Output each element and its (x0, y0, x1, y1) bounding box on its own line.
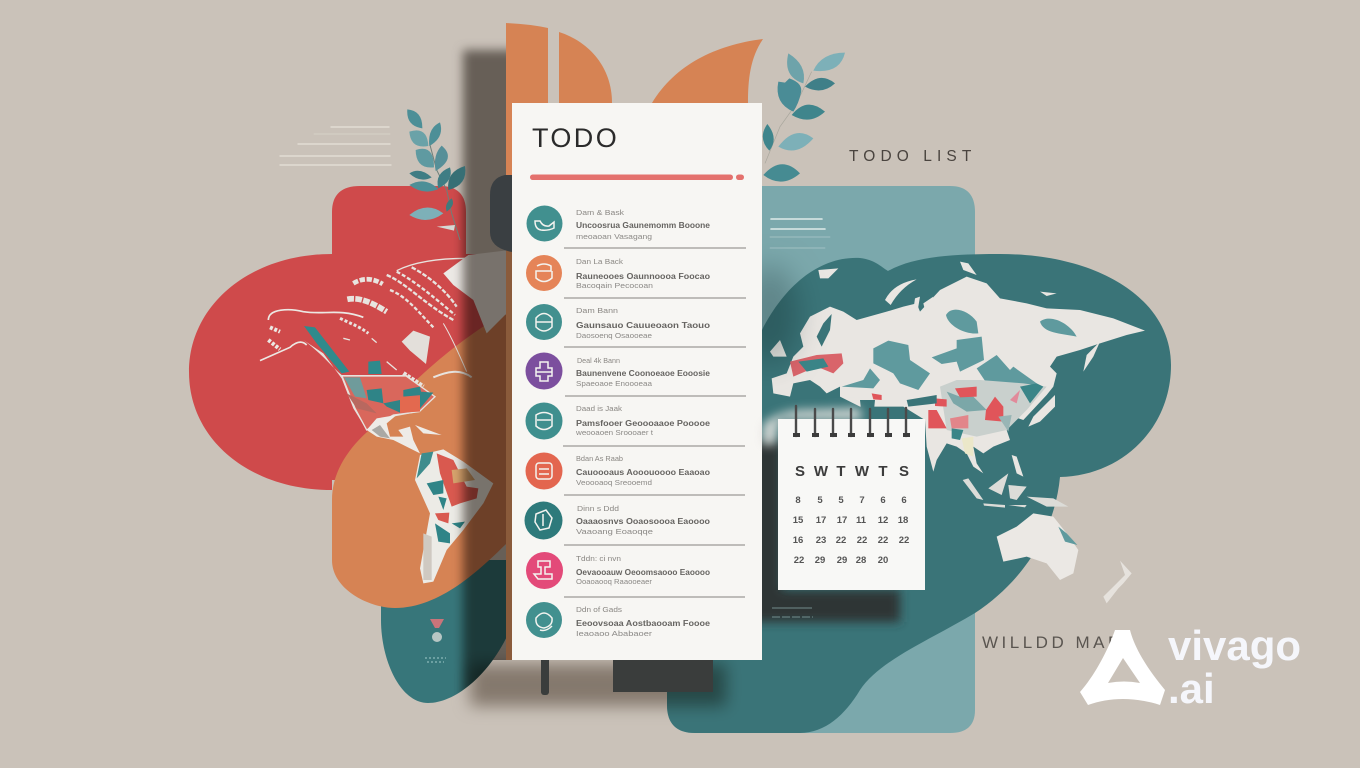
todo item 5: Daad is Jaak (576, 404, 622, 413)
todo item 8: Ooaoaooq Raaooeaer (576, 577, 653, 586)
todo item 2: Rauneooes Oaunnoooa Foocao (576, 272, 710, 281)
dark pin below panel (541, 655, 549, 695)
Baltic sea (817, 314, 832, 347)
calendar dates: 22 (899, 535, 909, 546)
Pacific coast teal strips (304, 326, 382, 374)
todo item 3: Dam Bann (576, 306, 618, 315)
calendar dates: 15 (793, 515, 804, 526)
Indonesia (963, 473, 1068, 508)
todo item 4: Spaeoaoe Enoooeaa (576, 379, 653, 388)
calendar dates: 22 (794, 555, 804, 566)
panel shadow: bottom (470, 664, 726, 706)
calendar weekday header: W (855, 463, 870, 480)
United States states (342, 376, 435, 430)
todo item 7: Dinn s Ddd (577, 504, 619, 513)
world map: Americas (260, 250, 510, 583)
calendar dates: 22 (878, 535, 888, 546)
dark tab behind panel (490, 175, 512, 252)
Europe color details (790, 353, 843, 377)
calendar dates: 22 (836, 535, 846, 546)
calendar dates: 7 (859, 495, 865, 506)
todo item 7: Vaaoang Eoaoqqe (576, 527, 653, 536)
Australia (997, 513, 1078, 580)
panel: dark teal blob (667, 254, 1171, 733)
Arctic and coastal islands (770, 262, 1100, 372)
calendar rings (796, 406, 906, 436)
calendar dates: 5 (838, 495, 844, 506)
calendar dates: 11 (856, 515, 867, 526)
calendar dates: 17 (837, 515, 847, 526)
South America (415, 449, 493, 583)
todo item 5: weooaoen Sroooaer t (575, 428, 654, 437)
todo item 1: meoaoan Vasagang (576, 232, 652, 241)
Middle East details (860, 395, 937, 417)
progress bar (530, 174, 744, 180)
calendar (778, 406, 925, 590)
decorative caption lines left (280, 127, 391, 165)
Greenland (443, 250, 510, 333)
Arctic islands (340, 258, 472, 387)
todo item 5 (526, 402, 711, 440)
calendar dates: 23 (816, 535, 826, 546)
todo item 1 (526, 206, 711, 242)
todo item 7: Oaaaosnvs Ooaosoooa Eaoooo (576, 517, 710, 526)
New Zealand (1103, 561, 1132, 603)
calendar dates: 29 (837, 555, 847, 566)
calendar weekday header: W (814, 463, 829, 480)
dark rectangle below panel (613, 655, 713, 692)
todo item 9: Ieaoaoo Ababaoer (576, 629, 653, 638)
todo item 9: Ddn of Gads (576, 605, 622, 614)
dividers (563, 248, 746, 597)
logo: vivago.ai (1080, 622, 1301, 712)
calendar dates: 29 (815, 555, 825, 566)
calendar ring holes (793, 433, 910, 437)
todo item 6 (526, 452, 710, 490)
todo item 2: Bacoqain Pecocoan (576, 281, 653, 290)
Alaska islands (268, 327, 280, 349)
heading: world map: WILLDD MAP (982, 633, 1123, 652)
todo item 4: Deal 4k Bann (577, 356, 620, 365)
infographic canvas (188, 23, 1300, 733)
panel shadow: left side (456, 43, 506, 693)
todo item 1: Dam & Bask (576, 208, 624, 217)
calendar weekday header: T (836, 463, 846, 480)
panel: orange blob (332, 310, 510, 608)
orange shape: tall left column (506, 23, 548, 660)
todo item 3: Daosoenq Osaooeae (576, 331, 652, 340)
todo item 8: Tddn: ci nvn (576, 554, 621, 563)
panel: todo list card (512, 103, 762, 660)
calendar dates (793, 495, 909, 566)
calendar dates: 22 (857, 535, 867, 546)
calendar dates: 8 (795, 495, 801, 506)
Mexico and Central America (367, 415, 420, 453)
logo domain: .ai (1168, 665, 1215, 712)
todo item 5: Pamsfooer Geoooaaoe Pooooe (576, 419, 711, 428)
title: TODO: TODO (532, 123, 619, 153)
todo item 2: Dan La Back (576, 257, 623, 266)
todo item 4: Baunenvene Coonoeaoe Eooosie (576, 369, 711, 378)
orange shape: right sail (652, 39, 763, 103)
todo item 6: Bdan As Raab (576, 454, 623, 463)
calendar weekday header: T (878, 463, 888, 480)
panel: light teal backdrop (667, 186, 975, 733)
todo item 7 (524, 502, 710, 540)
Hudson Bay (402, 331, 430, 364)
calendar weekday header: S (795, 463, 805, 480)
todo item 3: Gaunsauo Cauueoaon Taouo (576, 321, 710, 330)
calendar weekday header: S (899, 463, 909, 480)
soft shadow on teal right of panel (742, 265, 798, 365)
calendar dates: 28 (856, 555, 866, 566)
decorative small figure on teal (425, 619, 446, 662)
calendar weekday header (795, 463, 909, 480)
todo item 8: Oevaooauw Oeoomsaooo Eaoooo (576, 568, 710, 577)
todo item 8 (526, 552, 710, 589)
logo wordmark: vivago (1168, 622, 1301, 669)
strip shaded along panel (506, 190, 512, 660)
central Asia color mosaic (928, 380, 1047, 457)
todo item 2 (526, 255, 710, 291)
caption lines under calendar (772, 608, 813, 617)
white smear above calendar (762, 408, 862, 445)
todo item 4 (526, 352, 711, 390)
todo item 1: Uncoosrua Gaunemomm Booone (576, 221, 711, 230)
calendar shadow (745, 440, 900, 622)
heading: TODO LIST: TODO LIST (849, 148, 976, 165)
calendar dates: 16 (793, 535, 803, 546)
Eurasia landmass (772, 277, 1145, 473)
todo item 6: Cauoooaus Aooouoooo Eaaoao (576, 468, 710, 477)
orange shape: half leaf (559, 32, 612, 103)
calendar dates: 17 (816, 515, 826, 526)
panel: red blob (189, 186, 510, 490)
world map: Eurasia and Oceania (770, 262, 1145, 603)
panel: lower left teal shape (381, 560, 510, 703)
calendar dates: 5 (817, 495, 823, 506)
North America outline (303, 340, 433, 430)
caption lines on light teal (770, 219, 830, 248)
Japan and Philippines (1012, 395, 1055, 477)
calendar dates: 18 (898, 515, 908, 526)
sprig: left leaves (407, 109, 465, 240)
todo item 9: Eeoovsoaa Aostbaooam Foooe (576, 619, 711, 628)
inland teal regions (842, 310, 1077, 397)
calendar dates: 12 (878, 515, 888, 526)
sprig: right leaves (763, 53, 845, 182)
calendar dates: 6 (901, 495, 907, 506)
todo item 3 (526, 304, 710, 340)
calendar dates: 20 (878, 555, 888, 566)
todo item 6: Veoooaoq Sreooemd (576, 478, 652, 487)
logo mark (1080, 630, 1165, 705)
todo item 9 (526, 602, 711, 638)
calendar dates: 6 (880, 495, 886, 506)
